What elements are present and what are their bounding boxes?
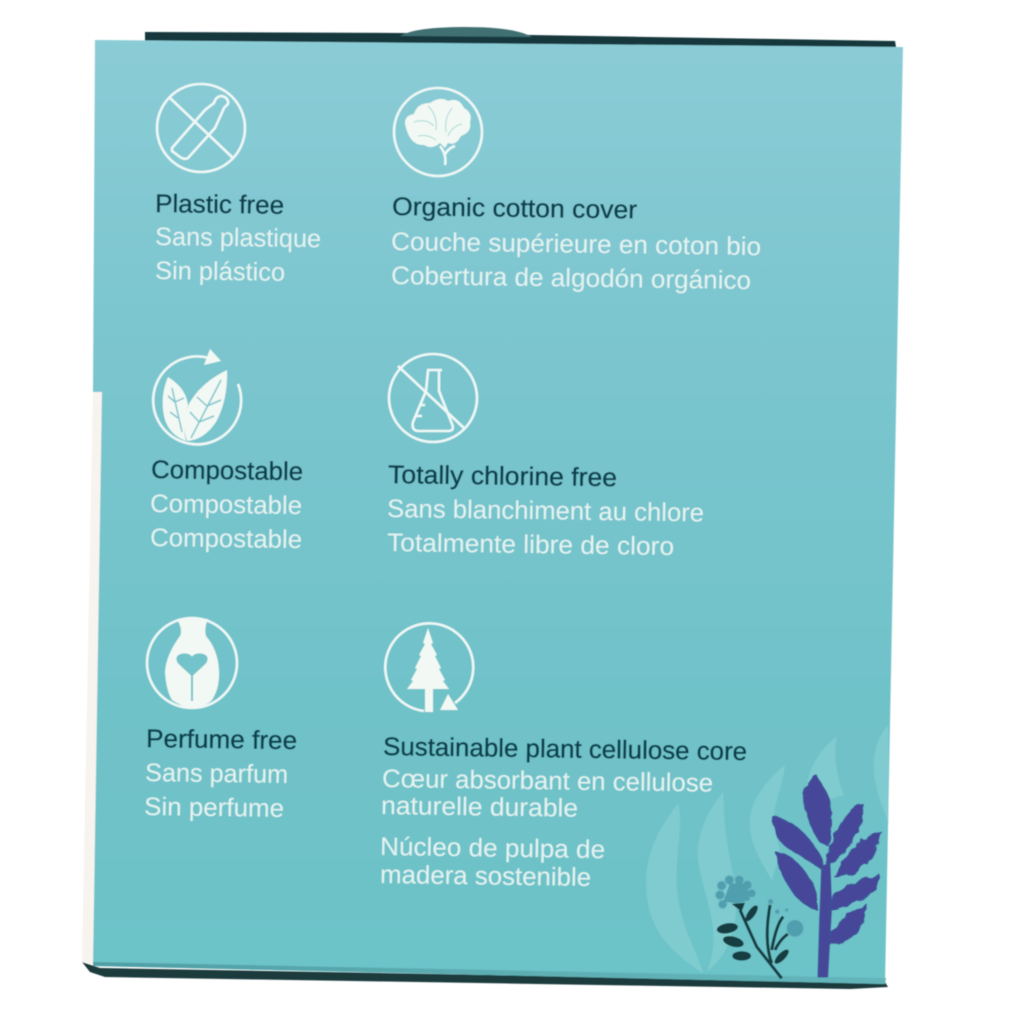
text: plastic free: Plastic free <box>155 190 284 220</box>
icon: perfume free body <box>147 618 237 708</box>
text: compostable: Compostable <box>151 456 303 486</box>
text: organic cotton cover: Cobertura de algodón orgánico <box>391 262 751 295</box>
box bottom edge <box>82 962 888 989</box>
text: compostable: Compostable <box>150 490 302 520</box>
text: plastic free: Sans plastique <box>155 223 321 253</box>
icon: compostable leaves <box>153 349 241 444</box>
text: sustainable plant cellulose core: Sustainable plant cellulose core <box>383 733 747 766</box>
text: sustainable plant cellulose core: madera sostenible <box>380 861 591 892</box>
text: sustainable plant cellulose core <box>380 733 747 892</box>
text: plastic free <box>155 190 321 287</box>
box front panel <box>93 40 903 984</box>
text: perfume free <box>144 725 297 823</box>
text: perfume free: Perfume free <box>146 725 297 755</box>
text: sustainable plant cellulose core: Núcleo de pulpa de <box>380 833 605 864</box>
text: totally chlorine free <box>387 461 704 561</box>
illustration: purple plant <box>773 775 881 977</box>
icon: sustainable tree <box>385 623 473 712</box>
text: totally chlorine free: Totally chlorine free <box>388 461 617 492</box>
text: organic cotton cover: Couche supérieure en coton bio <box>391 228 761 261</box>
text: sustainable plant cellulose core: naturelle durable <box>381 792 578 823</box>
icon: no chlorine flask <box>389 354 477 442</box>
text: totally chlorine free: Sans blanchiment au chlore <box>387 495 704 527</box>
text: organic cotton cover <box>391 193 761 295</box>
text: plastic free: Sin plástico <box>155 257 285 287</box>
text: compostable <box>150 456 303 554</box>
background flame pattern <box>646 725 888 973</box>
text: organic cotton cover: Organic cotton cover <box>392 193 638 224</box>
illustration: small flowers <box>715 875 804 978</box>
text: totally chlorine free: Totalmente libre de cloro <box>387 529 674 561</box>
pale left edge strip <box>82 392 103 965</box>
text: sustainable plant cellulose core: Cœur absorbant en cellulose <box>382 765 713 798</box>
bottom fold band <box>93 962 886 984</box>
box top edge <box>145 27 896 49</box>
text: compostable: Compostable <box>150 524 302 554</box>
text: perfume free: Sans parfum <box>145 759 288 789</box>
text: perfume free: Sin perfume <box>144 793 284 823</box>
icon: no plastic bottle <box>157 84 245 172</box>
icon: cotton boll <box>394 88 482 176</box>
